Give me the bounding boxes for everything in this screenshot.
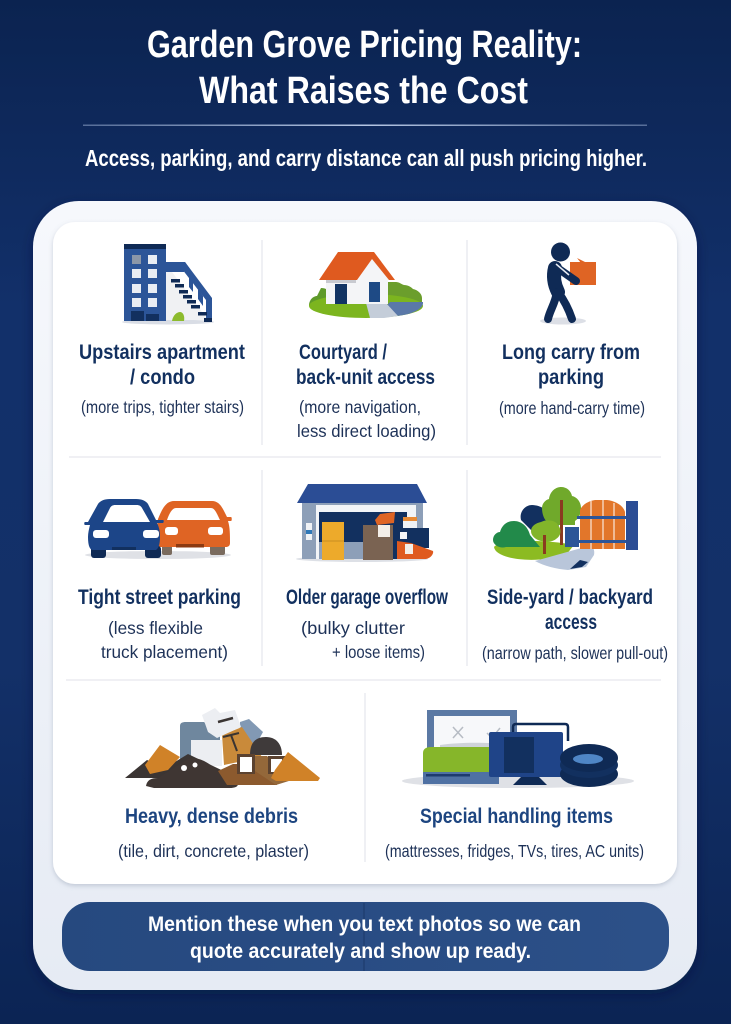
icon: debris pile [125,708,320,788]
callout banner [62,902,669,971]
panel: long carry [499,242,645,418]
callout text: quote accurately and show up ready. [190,939,531,963]
description: (tile, dirt, concrete, plaster) [118,841,309,861]
heading: access [545,610,597,634]
heading [502,340,640,389]
heading: Tight street parking [78,585,241,609]
title [147,24,582,112]
icon: garage with boxes [296,484,433,562]
panel: heavy dense debris [118,708,320,861]
icon: two cars [84,499,232,559]
description [101,618,228,662]
heading [79,340,245,389]
inner white panel [53,222,677,884]
description: truck placement) [101,642,228,662]
icon: house with lawn [309,252,423,318]
panel: older garage overflow [286,484,448,662]
description [301,618,425,662]
icon: apartment building with stairs [122,244,214,324]
heading: back-unit access [296,365,435,389]
title: Garden Grove Pricing Reality: [147,24,582,66]
icon: yard with gate [493,487,638,570]
heading: Side-yard / backyard [487,585,653,609]
heading: Special handling items [420,804,613,828]
panel: special handling items [385,710,644,861]
description: (less flexible [108,618,203,638]
description: (more trips, tighter stairs) [81,397,244,417]
callout text: Mention these when you text photos so we can [148,912,581,936]
panel: side-yard access [482,487,668,663]
heading: Courtyard / [299,340,387,364]
description: (more hand-carry time) [499,398,645,418]
description: less direct loading) [297,421,436,441]
description: + loose items) [332,642,425,662]
heading: parking [538,365,604,389]
header [83,24,647,171]
panel: upstairs apartment [79,244,245,417]
description: (bulky clutter [301,618,405,638]
description: (mattresses, fridges, TVs, tires, AC units) [385,841,644,861]
panel: courtyard [296,252,436,441]
heading: / condo [130,365,195,389]
heading [296,340,435,389]
description: (more navigation, [299,397,421,417]
heading: Heavy, dense debris [125,804,298,828]
description: (narrow path, slower pull-out) [482,643,668,663]
panel: tight street parking [78,499,241,662]
heading: Long carry from [502,340,640,364]
heading: Upstairs apartment [79,340,245,364]
icon: mattress, TV, tires [402,710,634,788]
description [297,397,436,441]
icon: person carrying box [540,242,596,324]
title: What Raises the Cost [199,70,528,112]
callout text [148,912,581,963]
heading: Older garage overflow [286,585,448,609]
heading [487,585,653,634]
outer card [33,201,697,990]
